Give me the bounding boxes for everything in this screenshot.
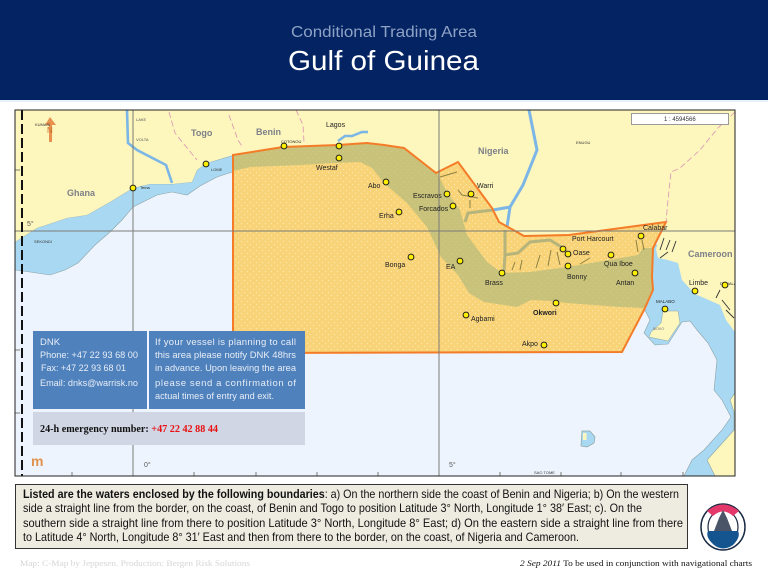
boundaries description panel: southern side a straight line from there to position Latitude 3° North, Longitude 8° East; d) On the eastern side a straight line from there bbox=[23, 516, 683, 530]
contact panel: Fax: +47 22 93 68 01 bbox=[41, 363, 126, 374]
country labels bbox=[67, 127, 733, 259]
port labels bbox=[316, 122, 708, 348]
port labels: Limbe bbox=[689, 280, 708, 287]
olive deep water band bbox=[233, 143, 653, 308]
emergency number panel bbox=[33, 412, 305, 445]
port labels: Antan bbox=[616, 280, 634, 287]
contact panel bbox=[33, 331, 147, 409]
notification panel: please send a confirmation of bbox=[155, 378, 296, 389]
latitude and longitude labels: 0° bbox=[144, 461, 151, 469]
notification panel: actual times of entry and exit. bbox=[155, 391, 274, 402]
port labels: Okwori bbox=[533, 310, 557, 317]
small town labels bbox=[34, 117, 737, 475]
scale box: 1 : 4594566 bbox=[664, 117, 696, 123]
notification panel: this area please notify DNK 48hrs bbox=[155, 350, 296, 361]
boundaries description panel: to Latitude 4° North, Longitude 8° 31′ East and then from there to the border, on the coast, of Nigeria and Cameroon. bbox=[23, 530, 579, 544]
port labels: Akpo bbox=[522, 341, 538, 348]
land: southern Cameroon and Gabon bbox=[707, 393, 735, 476]
small town labels: VOLTA bbox=[136, 137, 149, 142]
small town labels: LAKE bbox=[136, 117, 147, 122]
island: Bioko: MALABO bbox=[656, 299, 675, 304]
river: Niger bbox=[493, 110, 537, 227]
port labels: Brass bbox=[485, 280, 503, 287]
contact panel: Email: dnks@warrisk.no bbox=[40, 378, 138, 389]
latitude and longitude labels: 5° bbox=[27, 220, 34, 228]
small town labels: KUMASI bbox=[35, 122, 50, 127]
boundaries description panel: side a straight line from the border, on the coast, of Benin and Togo to position Latitude 3° North, Longitude 1° 38′ East; c). On the bbox=[23, 501, 642, 515]
publisher mark: m bbox=[31, 453, 43, 469]
delta creeks bbox=[440, 172, 644, 270]
grid lines bbox=[15, 110, 735, 476]
logo bbox=[701, 504, 745, 550]
emergency number panel: 24-h emergency number: +47 22 42 88 44 bbox=[40, 424, 218, 435]
shallow coastal water: Ghana to Benin bbox=[15, 155, 235, 275]
boundaries description panel bbox=[16, 484, 688, 548]
small town labels: DOUALA bbox=[720, 281, 737, 286]
country labels: Cameroon bbox=[688, 249, 733, 259]
delta channels bbox=[465, 210, 563, 271]
port labels: Agbami bbox=[471, 316, 495, 323]
island: Bioko bbox=[649, 299, 680, 341]
national borders bbox=[169, 110, 735, 222]
mangrove creeks near Cameroon bbox=[660, 238, 734, 318]
port labels: Westaf bbox=[316, 165, 338, 172]
small town labels: SAO TOME bbox=[534, 470, 555, 475]
orange boundary line bbox=[233, 143, 666, 353]
port labels: EA bbox=[446, 264, 456, 271]
title: Gulf of Guinea bbox=[288, 45, 479, 76]
left scale bar bbox=[21, 110, 23, 476]
port labels: Oase bbox=[573, 250, 590, 257]
country labels: Nigeria bbox=[478, 146, 510, 156]
north arrow bbox=[45, 117, 56, 142]
island: Sao Tome bbox=[581, 431, 595, 447]
notification panel: If your vessel is planning to call bbox=[155, 337, 296, 348]
contact panel: DNK bbox=[40, 337, 61, 348]
scale box bbox=[632, 114, 728, 124]
port labels: Qua Iboe bbox=[604, 261, 633, 268]
port labels: Calabar bbox=[643, 225, 668, 232]
boundaries description panel: Listed are the waters enclosed by the following boundaries: a) On the northern side the coast of Benin and Nigeria; b) On the western bbox=[23, 487, 679, 501]
notification panel: in advance. Upon leaving the area bbox=[155, 363, 297, 374]
small town labels: LOME bbox=[211, 167, 223, 172]
port markers bbox=[130, 143, 728, 348]
notification panel bbox=[149, 331, 305, 409]
port labels: Warri bbox=[477, 183, 494, 190]
land: West Africa bbox=[15, 110, 735, 332]
port labels: Bonga bbox=[385, 262, 405, 269]
island: Bioko: BIOKO bbox=[653, 327, 664, 331]
latitude and longitude labels bbox=[27, 220, 456, 469]
map credit: Map: C-Map by Jeppesen. Production: Bergen Risk Solutions bbox=[20, 559, 250, 568]
port labels: Abo bbox=[368, 183, 381, 190]
port labels: Lagos bbox=[326, 122, 346, 129]
map panel bbox=[15, 110, 737, 476]
country labels: Togo bbox=[191, 128, 213, 138]
date and navigation disclaimer: 2 Sep 2011 To be used in conjunction with navigational charts bbox=[520, 559, 752, 568]
map frame bbox=[15, 110, 735, 476]
conditional trading area bbox=[234, 162, 664, 352]
port labels: Forcados bbox=[419, 206, 449, 213]
small town labels: SEKONDI bbox=[34, 239, 52, 244]
subtitle: Conditional Trading Area bbox=[291, 24, 477, 41]
port labels: Erha bbox=[379, 213, 394, 220]
river: Volta bbox=[127, 110, 172, 183]
contact panel: Phone: +47 22 93 68 00 bbox=[40, 350, 138, 361]
lagos lagoon bbox=[338, 132, 368, 141]
port labels: Escravos bbox=[413, 193, 442, 200]
small town labels: Tema bbox=[140, 185, 151, 190]
shallow water: Cameroon and Gabon coast bbox=[640, 245, 735, 476]
port labels: Bonny bbox=[567, 274, 587, 281]
country labels: Benin bbox=[256, 127, 281, 137]
country labels: Ghana bbox=[67, 188, 96, 198]
port labels: Port Harcourt bbox=[572, 236, 614, 243]
small town labels: COTONOU bbox=[281, 139, 301, 144]
header banner bbox=[0, 0, 768, 100]
north arrow: N bbox=[47, 126, 53, 135]
small town labels: ENUGU bbox=[576, 140, 591, 145]
latitude and longitude labels: 5° bbox=[449, 461, 456, 469]
